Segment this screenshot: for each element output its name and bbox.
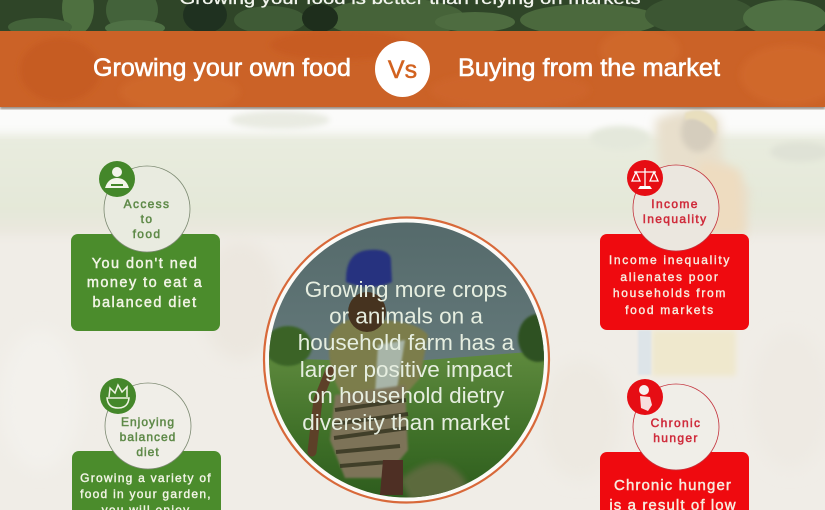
top photo strip: leaves [0,0,825,31]
card [71,234,220,331]
circle label: balanced [120,430,176,444]
central text: larger positive impact [300,357,513,382]
card text: food in your garden, [80,487,212,501]
central text: household farm has a [298,330,515,355]
icon: hungry child [627,379,663,415]
photo of farmer [269,222,544,498]
card text: Chronic hunger [614,477,732,494]
orange banner [0,28,825,112]
banner shadow [0,106,825,109]
circle label: Enjoying [121,415,175,429]
heading: buying: Buying from the market [458,54,720,82]
icon: person with plate [99,161,135,197]
icon: salad bowl [100,378,136,414]
panel: income inequality [600,160,749,330]
circle label: to [141,212,153,226]
vs badge [375,41,430,97]
card text: households from [613,286,727,300]
card text: food markets [625,303,715,317]
label circle [104,166,190,252]
circle label: food [133,227,161,241]
card text: Income inequality [609,253,731,267]
card [600,234,749,330]
vs badge: Vs [388,56,417,84]
card text: You don't ned [92,256,198,272]
icon: scales [627,160,663,196]
circle label: Inequality [643,212,707,226]
central text: Growing more crops [305,277,507,302]
panel: enjoying balanced diet [72,378,221,510]
card text: balanced diet [92,295,198,311]
card [72,451,221,510]
card text: alienates poor [620,270,720,284]
panel: access to food [71,161,220,331]
label circle [105,383,191,469]
central text: on household dietry [308,383,505,408]
circle label: diet [136,445,160,459]
background: faded field photo [0,107,825,510]
central text: diversity than market [302,410,511,435]
label circle [633,165,719,251]
circle label: Chronic [651,416,701,430]
circle label: hunger [653,431,699,445]
label circle [633,384,719,470]
central text: or animals on a [329,304,483,328]
card [600,452,749,510]
card text: money to eat a [87,275,203,291]
farmer body [329,318,428,400]
panel: chronic hunger [600,379,749,510]
circle label: Access [124,197,170,211]
heading: growing: Growing your own food [93,54,351,82]
circle label: Income [651,197,699,211]
card text: Growing a variety of [80,471,212,485]
panel: central photo circle [260,215,558,505]
faded figure [655,110,750,235]
